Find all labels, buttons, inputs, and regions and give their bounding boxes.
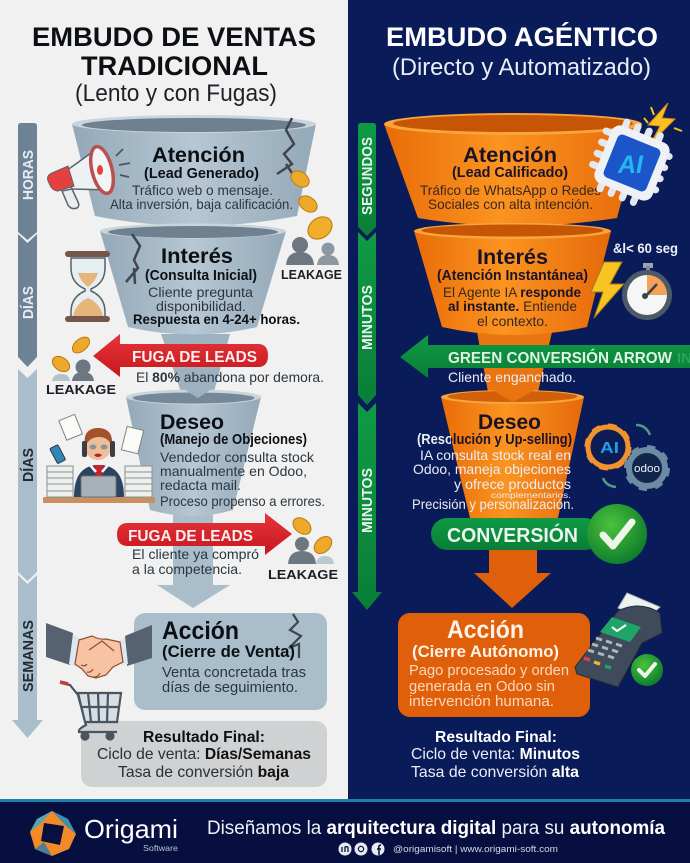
text: acción description: Venta concretada tras (162, 664, 306, 681)
text: acción description: Pago procesado y orden (409, 662, 569, 679)
timeline segment: semanas: SEMANAS (20, 620, 37, 692)
heading: acción: Acción (162, 617, 239, 645)
text: interés description: Respuesta en 4-24+ horas. (133, 311, 300, 327)
icon: lightning bolt (591, 262, 624, 318)
brand name: Software (143, 844, 179, 853)
heading: acción: Acción (447, 616, 524, 644)
icon: AI and Odoo gears (588, 425, 666, 487)
timeline segment: segundos: SEGUNDOS (359, 137, 376, 215)
subheading: lead calificado: (Lead Calificado) (452, 164, 568, 181)
icon: stressed salesperson (43, 414, 155, 503)
timeline segment: días (18, 234, 37, 367)
title: traditional: TRADICIONAL (81, 51, 268, 81)
icon: coins and people leak 2 (288, 514, 335, 564)
text: deseo description: complementarios. (491, 491, 571, 500)
subheading: lead generado: (Lead Generado) (144, 165, 259, 182)
text: acción description: generada en Odoo sin (409, 678, 555, 695)
text: atención description (420, 182, 601, 212)
text: interés description (443, 284, 581, 329)
funnel neck: traditional interest to desire (161, 334, 230, 395)
timeline segment: días: DÍAS (20, 286, 37, 319)
icon: leaking people (286, 237, 339, 265)
label: leakage: LEAKAGE (268, 567, 338, 582)
timeline segment: minutos (358, 232, 376, 405)
social icons (338, 842, 384, 856)
arrow: green conversion: GREEN CONVERSIÓN ARROW (448, 348, 673, 367)
heading: interés: Interés (161, 245, 233, 268)
text: acción description (409, 662, 569, 710)
title: agentic: (Directo y Automatizado) (392, 54, 651, 81)
text: deseo description: manualmente en Odoo, (160, 463, 307, 479)
arrow tip over deseo (488, 388, 538, 402)
icon: payment terminal (575, 593, 663, 687)
funnel: deseo agéntico (412, 388, 584, 608)
timeline: traditional (12, 123, 43, 738)
brand name: Origami (84, 814, 178, 844)
arrow: fuga de leads 1: FUGA DE LEADS (132, 349, 257, 366)
icon: AI chip with bolt: AI (617, 151, 644, 179)
subheading: cierre de venta: (Cierre de Venta) (162, 642, 295, 661)
text: interés description (133, 284, 300, 327)
icon: megaphone (48, 144, 130, 209)
panel: resultado final tradicional (81, 721, 327, 787)
contact line: @origamisoft | www.origami-soft.com (393, 844, 558, 854)
icon: handshake (46, 623, 152, 678)
text: deseo description: IA consulta stock real en (420, 447, 571, 463)
text: acción description (162, 664, 306, 696)
panel: agentic funnel background (348, 0, 690, 800)
heading: deseo: Deseo (478, 411, 541, 434)
text: resultado final agéntico: Tasa de conversión alta (411, 764, 579, 781)
text: competencia: a la competencia. (132, 561, 242, 577)
text: atención description: Tráfico web o mensaje. (132, 182, 273, 198)
panel: traditional funnel background (0, 0, 348, 800)
timeline segment: minutos 2 (352, 403, 382, 610)
timeline segment: minutos 2: MINUTOS (359, 468, 376, 533)
pill: conversión (431, 504, 647, 564)
heading: atención: Atención (463, 144, 557, 167)
title: traditional: (Lento y con Fugas) (75, 80, 277, 107)
funnel: deseo tradicional (126, 388, 325, 608)
icon: coins falling (288, 168, 336, 244)
text: acción description: días de seguimiento. (162, 679, 298, 696)
icon: crack (126, 234, 140, 284)
text: deseo description: y ofrece productos (454, 476, 571, 492)
timeline segment: horas (18, 123, 37, 240)
timeline segment: días 2: DÍAS (20, 448, 37, 482)
text: atención description: Tráfico de WhatsApp o Redes (420, 182, 601, 198)
timeline segment: semanas (12, 575, 43, 738)
text: acción description: intervención humana. (409, 693, 554, 710)
subheading: atención instantánea: (Atención Instantánea) (437, 267, 588, 284)
icon: check badge (631, 654, 663, 686)
text: deseo description: Odoo, maneja objeciones (413, 461, 571, 477)
heading: interés: Interés (477, 246, 548, 269)
icon: shopping cart (60, 682, 121, 740)
text: interés description: disponibilidad. (156, 298, 246, 314)
icon: crack (289, 614, 301, 658)
heading: deseo: Deseo (160, 411, 224, 434)
icon: AI and Odoo gears: AI (600, 440, 619, 457)
funnel: atención agéntico (384, 113, 642, 226)
text: interés description: El Agente IA responde (443, 284, 581, 300)
text: resultado final agéntico: Ciclo de venta: Minutos (411, 746, 580, 763)
heading: atención: Atención (152, 144, 245, 167)
timeline segment: días 2 (18, 369, 37, 581)
panel: acción agéntico (398, 613, 590, 717)
text: resultado final agéntico (411, 729, 580, 781)
text: deseo description (160, 449, 325, 509)
text: atención description (110, 182, 293, 212)
title: traditional (32, 22, 316, 107)
panel: resultado final tradicional: Resultado Final: (143, 729, 265, 746)
text: deseo description: Proceso propenso a errores. (160, 493, 325, 509)
subheading: resolución y up-selling: (Resolución y Up-selling) (417, 431, 572, 448)
funnel neck: agentic interest to desire (477, 332, 552, 404)
text: deseo description: Vendedor consulta stock (160, 449, 315, 465)
subheading: consulta inicial: (Consulta Inicial) (145, 267, 257, 284)
tagline: Diseñamos la arquitectura digital para su autonomía (207, 818, 665, 839)
text: interés description: al instante. Entiende (448, 298, 577, 314)
footer (0, 799, 690, 863)
icon: hourglass (65, 251, 110, 322)
text: deseo description (412, 447, 574, 512)
text: cliente enganchado: Cliente enganchado. (448, 369, 576, 385)
panel: resultado final tradicional: Ciclo de venta: Días/Semanas (97, 746, 311, 763)
icon: coins and people leak 1 (49, 334, 94, 381)
arrow: fuga de leads 2: FUGA DE LEADS (128, 528, 253, 545)
text: interés description: el contexto. (477, 313, 548, 329)
text: interés description: Cliente pregunta (148, 284, 253, 300)
text: competencia (132, 546, 259, 577)
icon: AI chip with bolt (585, 103, 682, 208)
title: agentic (386, 21, 658, 81)
icon: crack (277, 118, 294, 176)
label: leakage: LEAKAGE (281, 267, 342, 282)
text: abandono: El 80% abandona por demora. (136, 369, 324, 385)
panel: acción tradicional (134, 613, 327, 710)
arrow: fuga de leads 1 (93, 334, 268, 377)
text: deseo description: redacta mail. (160, 477, 241, 493)
label: under 60 seconds: &l< 60 seg (613, 240, 678, 256)
label: leakage: LEAKAGE (46, 382, 116, 397)
title: traditional: EMBUDO DE VENTAS (32, 22, 316, 52)
timeline segment: horas: HORAS (20, 150, 37, 200)
arrow tip over deseo (182, 388, 213, 398)
icon: check badge (587, 504, 647, 564)
subheading: cierre autónomo: (Cierre Autónomo) (412, 642, 559, 661)
subheading: manejo de objeciones: (Manejo de Objeciones) (160, 431, 307, 448)
timeline: agentic (352, 123, 382, 610)
funnel: atención tradicional (72, 115, 316, 226)
panel: resultado final tradicional: Tasa de conversión baja (118, 764, 289, 781)
logo: origami (30, 811, 76, 856)
text: competencia: El cliente ya compró (132, 546, 259, 562)
funnel: interés tradicional (100, 224, 300, 334)
text: atención description: Sociales con alta intención. (428, 196, 593, 212)
arrow: fuga de leads 2 (117, 513, 292, 555)
funnel: interés agéntico (414, 223, 611, 335)
timeline segment: minutos: MINUTOS (359, 285, 376, 350)
icon: AI and Odoo gears: odoo (634, 463, 660, 475)
text: atención description: Alta inversión, baja calificación. (110, 196, 293, 212)
title: agentic: EMBUDO AGÉNTICO (386, 21, 658, 52)
text: resultado final agéntico: Resultado Final: (435, 729, 557, 746)
pill: conversión: CONVERSIÓN (447, 523, 578, 547)
arrow: green conversion (400, 335, 690, 378)
text: deseo description: Precisión y personalización. (412, 496, 574, 512)
icon: stopwatch (622, 263, 672, 320)
